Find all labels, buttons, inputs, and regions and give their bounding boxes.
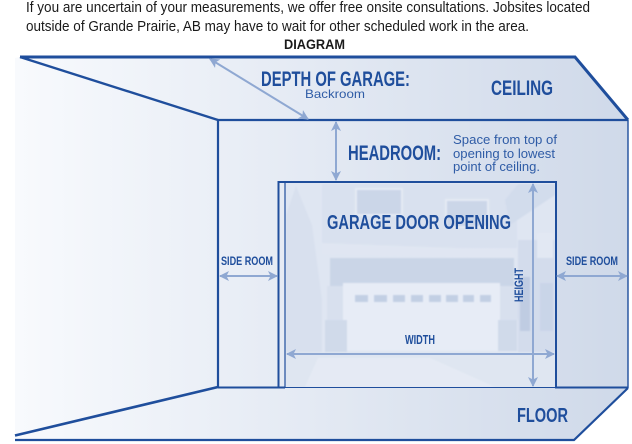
label: garage door opening: GARAGE DOOR OPENING bbox=[327, 212, 511, 234]
porch recess bbox=[330, 258, 514, 286]
headroom description bbox=[453, 133, 558, 174]
door opening photo bbox=[285, 183, 555, 387]
arrow: left side room bbox=[220, 275, 277, 277]
stone pillars bbox=[325, 320, 347, 353]
arrow: width bbox=[287, 353, 554, 355]
intro text bbox=[26, 0, 590, 35]
arrow: depth of garage bbox=[210, 59, 308, 119]
headroom description: point of ceiling. bbox=[453, 160, 540, 174]
tree bbox=[286, 186, 322, 352]
arrow: right side room bbox=[557, 275, 627, 277]
driveway bbox=[285, 352, 555, 387]
label: depth of garage: DEPTH OF GARAGE: bbox=[261, 67, 410, 91]
label: height: HEIGHT bbox=[512, 268, 526, 302]
door window row bbox=[355, 295, 491, 302]
label: depth of garage bbox=[261, 67, 410, 101]
headroom description: opening to lowest bbox=[453, 147, 556, 161]
roof band bbox=[322, 243, 518, 258]
label: headroom: HEADROOM: bbox=[348, 142, 441, 165]
label: ceiling: CEILING bbox=[491, 76, 553, 100]
intro text: outside of Grande Prairie, AB may have to wait for other scheduled work in the area. bbox=[26, 18, 529, 35]
label: floor: FLOOR bbox=[517, 404, 568, 427]
garage door panel bbox=[342, 282, 500, 319]
headroom description: Space from top of bbox=[453, 133, 558, 147]
windows bbox=[356, 189, 402, 215]
diagram heading: DIAGRAM bbox=[284, 37, 345, 52]
label: left side room: SIDE ROOM bbox=[221, 254, 273, 268]
roof at right of house bbox=[516, 184, 555, 220]
right wing of house bbox=[518, 240, 555, 352]
arrow: height bbox=[532, 184, 534, 386]
upper storey bbox=[322, 184, 517, 248]
label: depth of garage: Backroom bbox=[305, 87, 365, 101]
porch sides bbox=[327, 286, 343, 320]
arrow: headroom bbox=[335, 122, 337, 180]
label: width: WIDTH bbox=[405, 333, 435, 347]
